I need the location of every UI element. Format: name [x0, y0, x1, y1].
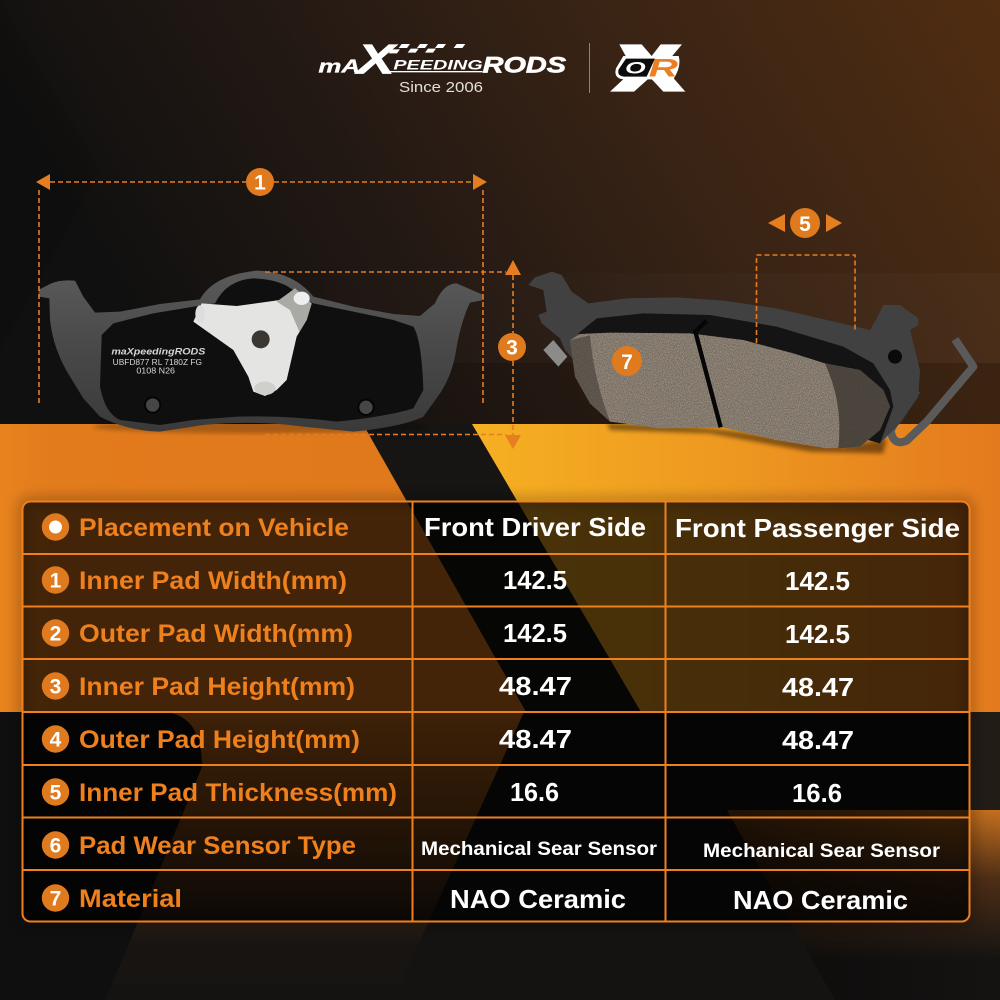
brand logo — [318, 35, 566, 82]
row: placement on vehicle: Placement on Vehicle — [79, 514, 349, 542]
row 5: inner pad thickness: 16.6 — [792, 778, 842, 808]
sensor tab — [543, 340, 567, 367]
OR X logo — [610, 44, 685, 92]
dimension 1: width — [36, 168, 487, 404]
wordmark: RODS — [483, 53, 566, 78]
stamped text: UBFD877 RL 7180Z FG — [113, 357, 202, 367]
wordmark: X — [355, 35, 399, 82]
row 3: inner pad height — [42, 671, 854, 702]
row 6: pad wear sensor type — [42, 831, 941, 862]
dimension 5: thickness: 5 — [799, 213, 811, 236]
wordmark: PEEDING — [393, 56, 483, 72]
row 7: material: Material — [79, 885, 182, 913]
OR X logo: O — [625, 58, 646, 77]
row 2: outer pad width: 142.5 — [785, 619, 850, 649]
row 1: inner pad width: 142.5 — [785, 566, 850, 596]
row 4: outer pad height: Outer Pad Height(mm) — [79, 726, 360, 754]
row 1: inner pad width — [42, 565, 850, 596]
row: placement on vehicle: Front Passenger Side — [675, 513, 960, 543]
row 7: material: NAO Ceramic — [450, 884, 626, 914]
row 2: outer pad width: Outer Pad Width(mm) — [79, 620, 353, 648]
row 4: outer pad height: 48.47 — [499, 724, 572, 754]
stamped text — [111, 346, 206, 376]
callout 7: material: 7 — [621, 351, 633, 374]
row 3: inner pad height: 3 — [50, 676, 61, 698]
row 2: outer pad width: 2 — [50, 622, 61, 646]
icon: checkered flag — [389, 44, 465, 53]
rivets — [145, 397, 374, 415]
stamped text: maXpeedingRODS — [111, 346, 206, 356]
row 2: outer pad width: 142.5 — [503, 618, 567, 648]
row 4: outer pad height: 4 — [50, 728, 62, 752]
row 5: inner pad thickness: 16.6 — [510, 777, 559, 807]
tagline: Since 2006 — [399, 79, 483, 96]
dimension 5: thickness — [756, 208, 855, 343]
dimension 3: height — [265, 260, 526, 449]
table — [22, 501, 970, 922]
stamped text: 0108 N26 — [136, 366, 175, 376]
row 3: inner pad height: Inner Pad Height(mm) — [79, 673, 355, 701]
pad slot — [695, 321, 721, 427]
right brake pad: friction view — [528, 272, 973, 453]
dimension 3: height: 3 — [506, 336, 518, 360]
wordmark: mA — [318, 55, 360, 76]
row 1: inner pad width: 1 — [50, 570, 62, 592]
row 7: material — [42, 884, 908, 915]
row 6: pad wear sensor type: Pad Wear Sensor Type — [79, 832, 356, 860]
row 3: inner pad height: 48.47 — [782, 672, 854, 702]
dimension 1: width: 1 — [254, 172, 266, 194]
row 6: pad wear sensor type: Mechanical Sear Sensor — [703, 841, 941, 862]
metal clip — [193, 288, 312, 396]
row 3: inner pad height: 48.47 — [499, 671, 572, 701]
row 5: inner pad thickness: Inner Pad Thickness(mm) — [79, 779, 397, 807]
callout 7: material — [612, 346, 642, 376]
row 6: pad wear sensor type: 6 — [50, 834, 61, 858]
OR X logo: R — [649, 55, 679, 83]
row: placement on vehicle — [42, 512, 960, 543]
row 7: material: 7 — [50, 888, 61, 910]
spring clip — [891, 339, 973, 442]
row 6: pad wear sensor type: Mechanical Sear Sensor — [421, 839, 658, 860]
row 5: inner pad thickness — [42, 777, 842, 808]
row 1: inner pad width: 142.5 — [503, 565, 567, 595]
left brake pad: back view — [38, 271, 484, 433]
row 4: outer pad height — [42, 724, 854, 755]
row 4: outer pad height: 48.47 — [782, 725, 854, 755]
friction material — [570, 333, 890, 448]
logo divider — [589, 43, 590, 93]
row 1: inner pad width: Inner Pad Width(mm) — [79, 567, 347, 595]
row: placement on vehicle: Front Driver Side — [424, 512, 646, 542]
wordmark — [318, 35, 566, 82]
row 2: outer pad width — [42, 618, 850, 649]
row 7: material: NAO Ceramic — [733, 885, 908, 915]
row 5: inner pad thickness: 5 — [50, 782, 62, 804]
